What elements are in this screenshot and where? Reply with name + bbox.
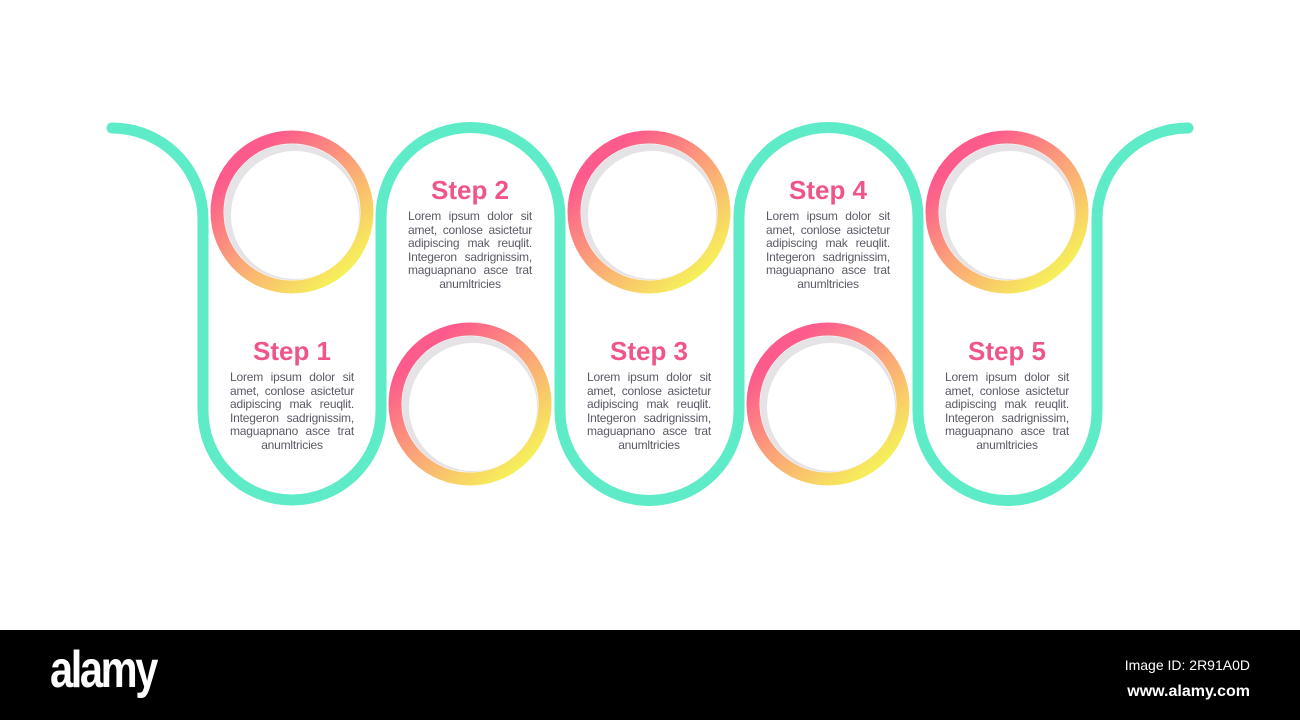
ring 2 <box>395 329 545 479</box>
ring 3 <box>574 137 724 287</box>
step 5 text: Step 5 <box>968 336 1046 366</box>
step 3 text: Step 3 <box>610 336 688 366</box>
step 1 text: Step 1 <box>253 336 331 366</box>
step 4 text: Lorem ipsum dolor sit amet, conlose asictetur adipiscing mak reuqlit. Integeron sadrignissim, maguapnano asce trat anumltricies <box>766 209 890 291</box>
step 2 text: Step 2 <box>431 175 509 205</box>
ring 4 <box>753 329 903 479</box>
step 2 text: Lorem ipsum dolor sit amet, conlose asictetur adipiscing mak reuqlit. Integeron sadrignissim, maguapnano asce trat anumltricies <box>408 209 532 291</box>
footer bar <box>0 630 1300 720</box>
logo: alamy <box>50 641 156 699</box>
image id <box>1125 657 1250 700</box>
image id: Image ID: 2R91A0D <box>1125 657 1250 673</box>
ring 5 <box>932 137 1082 287</box>
step 5 text: Lorem ipsum dolor sit amet, conlose asictetur adipiscing mak reuqlit. Integeron sadrignissim, maguapnano asce trat anumltricies <box>945 370 1069 452</box>
image id: www.alamy.com <box>1127 683 1250 700</box>
step 4 text: Step 4 <box>789 175 867 205</box>
ring 1 <box>217 137 367 287</box>
step 1 text: Lorem ipsum dolor sit amet, conlose asictetur adipiscing mak reuqlit. Integeron sadrignissim, maguapnano asce trat anumltricies <box>230 370 354 452</box>
teal wavy line <box>112 128 1188 501</box>
step 3 text: Lorem ipsum dolor sit amet, conlose asictetur adipiscing mak reuqlit. Integeron sadrignissim, maguapnano asce trat anumltricies <box>587 370 711 452</box>
